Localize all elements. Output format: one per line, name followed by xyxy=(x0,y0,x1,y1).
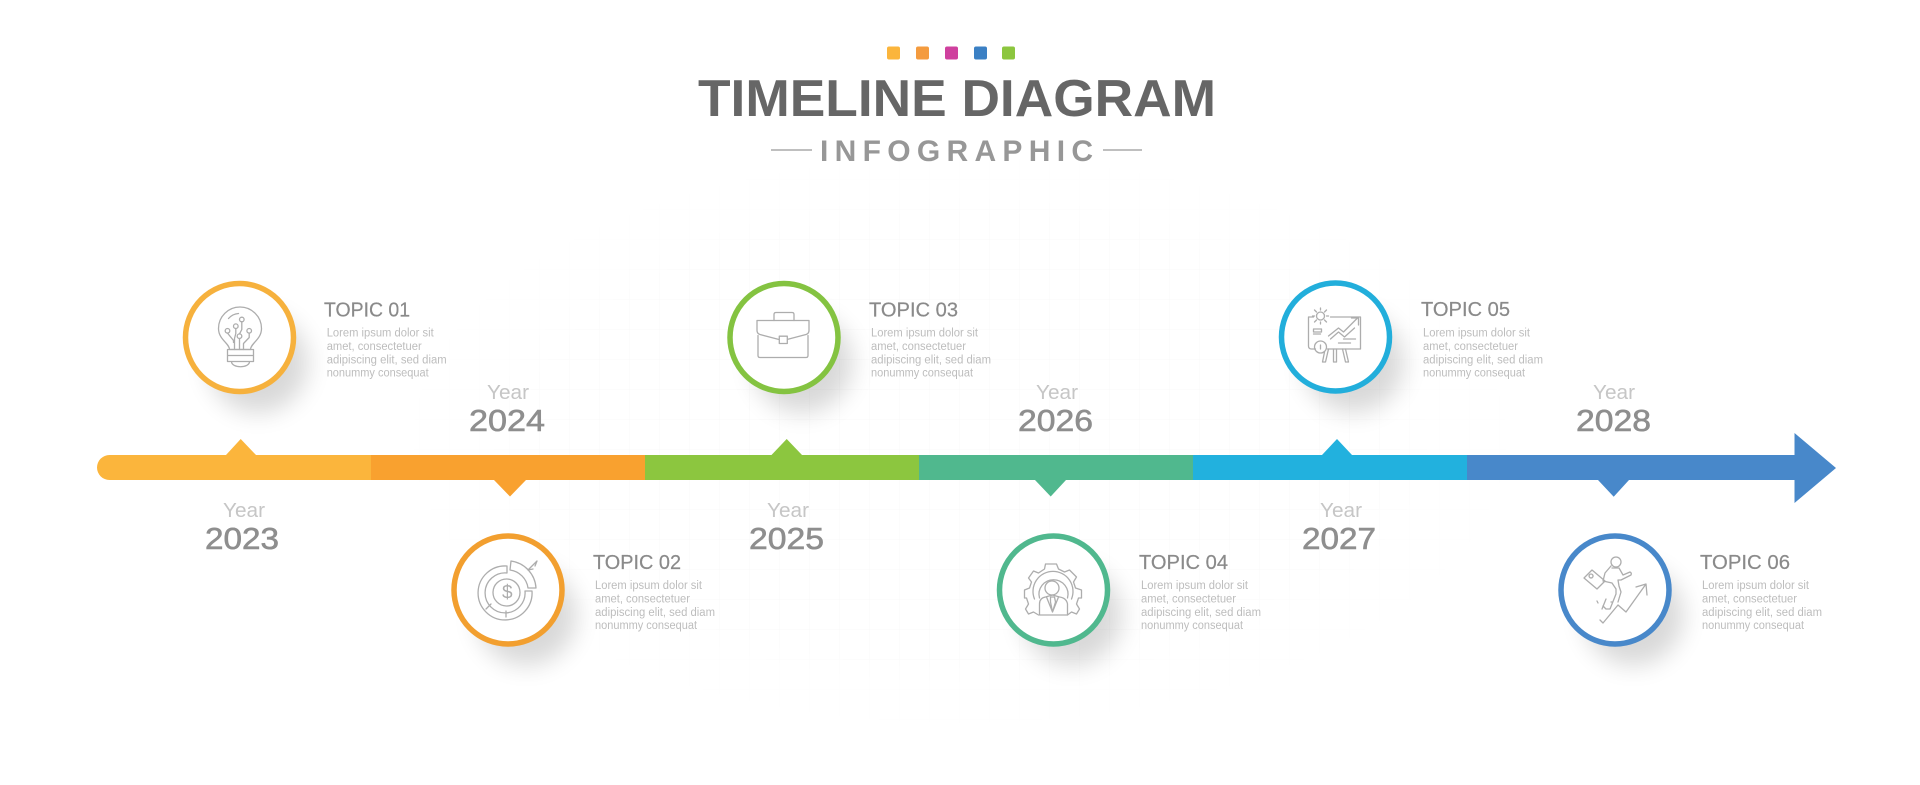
text: topic 03: Lorem ipsum dolor sit xyxy=(871,328,979,340)
icon: briefcase xyxy=(757,312,809,358)
milestone 2023 label: Year xyxy=(223,499,265,522)
text: topic 02: amet, consectetuer xyxy=(595,594,690,606)
icon: gear with person xyxy=(1024,564,1082,615)
text: topic 04 xyxy=(1139,552,1261,632)
text: topic 06: TOPIC 06 xyxy=(1700,552,1790,574)
text: topic 04: nonummy consequat xyxy=(1141,620,1244,632)
subtitle: INFOGRAPHIC xyxy=(820,135,1093,168)
text: topic 02: Lorem ipsum dolor sit xyxy=(595,580,703,592)
text: topic 04: adipiscing elit, sed diam xyxy=(1141,607,1261,619)
ring: topic 05 xyxy=(1282,283,1390,391)
panel: topic 06 xyxy=(1561,536,1822,666)
text: topic 01 xyxy=(324,300,447,380)
colour squares xyxy=(887,46,1015,60)
milestone 2027 label xyxy=(1302,499,1376,556)
ring: topic 02 xyxy=(454,536,562,644)
milestone 2028 label: Year xyxy=(1593,381,1635,404)
icon: light bulb xyxy=(218,307,262,367)
text: topic 02 xyxy=(593,552,715,632)
milestone 2026 label xyxy=(1018,381,1093,438)
text: topic 01: TOPIC 01 xyxy=(324,300,410,322)
text: topic 03: TOPIC 03 xyxy=(869,300,958,322)
milestone 2026 label: Year xyxy=(1036,381,1078,404)
panel: topic 05 xyxy=(1282,283,1543,412)
milestone 2025 label: 2025 xyxy=(749,522,824,556)
timeline arrow bar xyxy=(97,433,1836,503)
text: topic 05: adipiscing elit, sed diam xyxy=(1423,354,1543,366)
text: topic 05: amet, consectetuer xyxy=(1423,341,1518,353)
milestone 2024 label: Year xyxy=(487,381,529,404)
text: topic 06: adipiscing elit, sed diam xyxy=(1702,607,1822,619)
icon: dollar chart: $ xyxy=(502,582,513,604)
text: topic 03: nonummy consequat xyxy=(871,368,974,380)
text: topic 03 xyxy=(869,300,991,380)
text: topic 05 xyxy=(1421,299,1543,380)
text: topic 04: TOPIC 04 xyxy=(1139,552,1228,574)
text: topic 06: amet, consectetuer xyxy=(1702,594,1797,606)
milestone 2026 label: 2026 xyxy=(1018,404,1093,438)
text: topic 05: Lorem ipsum dolor sit xyxy=(1423,328,1531,340)
icon: presentation board xyxy=(1308,308,1360,362)
text: topic 01: Lorem ipsum dolor sit xyxy=(327,328,434,340)
text: topic 05: TOPIC 05 xyxy=(1421,299,1510,321)
text: topic 02: TOPIC 02 xyxy=(593,552,681,574)
text: topic 01: amet, consectetuer xyxy=(327,341,422,353)
text: topic 04: amet, consectetuer xyxy=(1141,594,1236,606)
ring: topic 06 xyxy=(1561,536,1669,644)
milestone 2027 label: 2027 xyxy=(1302,522,1376,556)
milestone 2027 label: Year xyxy=(1320,499,1362,522)
panel: topic 04 xyxy=(1000,536,1261,666)
text: topic 03: adipiscing elit, sed diam xyxy=(871,354,991,366)
milestone 2025 label xyxy=(749,499,824,556)
text: topic 04: Lorem ipsum dolor sit xyxy=(1141,580,1249,592)
text: topic 06: nonummy consequat xyxy=(1702,620,1805,632)
text: topic 06 xyxy=(1700,552,1822,632)
milestone 2028 label xyxy=(1576,381,1651,438)
title: TIMELINE DIAGRAM xyxy=(698,70,1216,128)
text: topic 02: adipiscing elit, sed diam xyxy=(595,607,715,619)
milestone 2024 label: 2024 xyxy=(469,404,545,438)
ring: topic 01 xyxy=(186,284,294,392)
milestone 2025 label: Year xyxy=(767,499,809,522)
icon: dollar chart xyxy=(478,561,537,620)
milestone 2023 label: 2023 xyxy=(205,522,279,556)
text: topic 05: nonummy consequat xyxy=(1423,368,1526,380)
text: topic 01: adipiscing elit, sed diam xyxy=(327,354,447,366)
milestone 2024 label xyxy=(469,381,545,438)
panel: topic 03 xyxy=(730,284,991,413)
text: topic 01: nonummy consequat xyxy=(327,368,429,380)
panel: topic 01 xyxy=(186,284,447,413)
ring: topic 03 xyxy=(730,284,838,392)
ring: topic 04 xyxy=(1000,536,1108,644)
text: topic 06: Lorem ipsum dolor sit xyxy=(1702,580,1810,592)
icon: businessman climbing arrow xyxy=(1584,557,1647,623)
panel: topic 02 xyxy=(454,536,715,666)
text: topic 02: nonummy consequat xyxy=(595,620,698,632)
milestone 2028 label: 2028 xyxy=(1576,404,1651,438)
text: topic 03: amet, consectetuer xyxy=(871,341,966,353)
milestone 2023 label xyxy=(205,499,279,556)
